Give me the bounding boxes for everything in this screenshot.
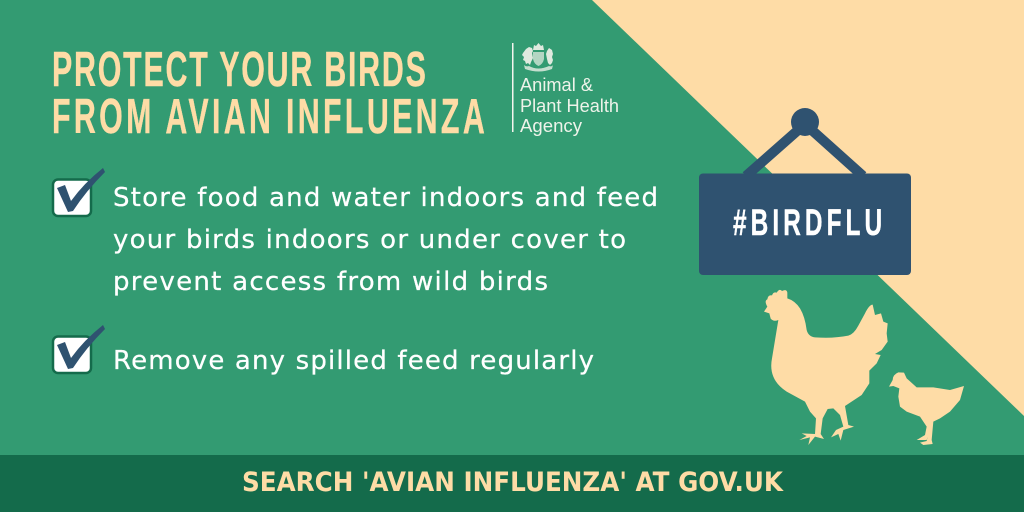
checklist text 1 [113, 183, 658, 297]
hanging sign [699, 108, 911, 275]
cream diagonal corner panel [592, 0, 1024, 416]
checklist text 1: your birds indoors or under cover to [113, 225, 626, 255]
logo text [520, 75, 619, 136]
footer bar [0, 455, 1024, 512]
icon: chick [889, 372, 964, 445]
logo text: Agency [520, 116, 582, 136]
sign hashtag text: #BIRDFLU [733, 202, 882, 243]
icon: royal crest [522, 43, 553, 72]
title: FROM AVIAN INFLUENZA [52, 89, 485, 144]
sign pin [791, 108, 819, 136]
checklist item 2 [53, 325, 594, 376]
icon: checkbox [53, 168, 105, 216]
logo: Animal & Plant Health Agency [512, 43, 619, 136]
footer text: SEARCH 'AVIAN INFLUENZA' AT GOV.UK [242, 467, 784, 498]
checklist text 2: Remove any spilled feed regularly [113, 346, 594, 376]
logo text: Plant Health [520, 96, 619, 116]
logo text: Animal & [520, 75, 593, 95]
checklist item 1 [53, 168, 658, 297]
checklist text 1: Store food and water indoors and feed [113, 183, 658, 213]
title: PROTECT YOUR BIRDS [52, 42, 426, 97]
icon: hen [764, 290, 888, 445]
checklist text 1: prevent access from wild birds [113, 267, 548, 297]
sign board [699, 174, 911, 275]
sign straps [746, 124, 863, 176]
title [52, 42, 485, 144]
icon: checkbox [53, 325, 105, 373]
